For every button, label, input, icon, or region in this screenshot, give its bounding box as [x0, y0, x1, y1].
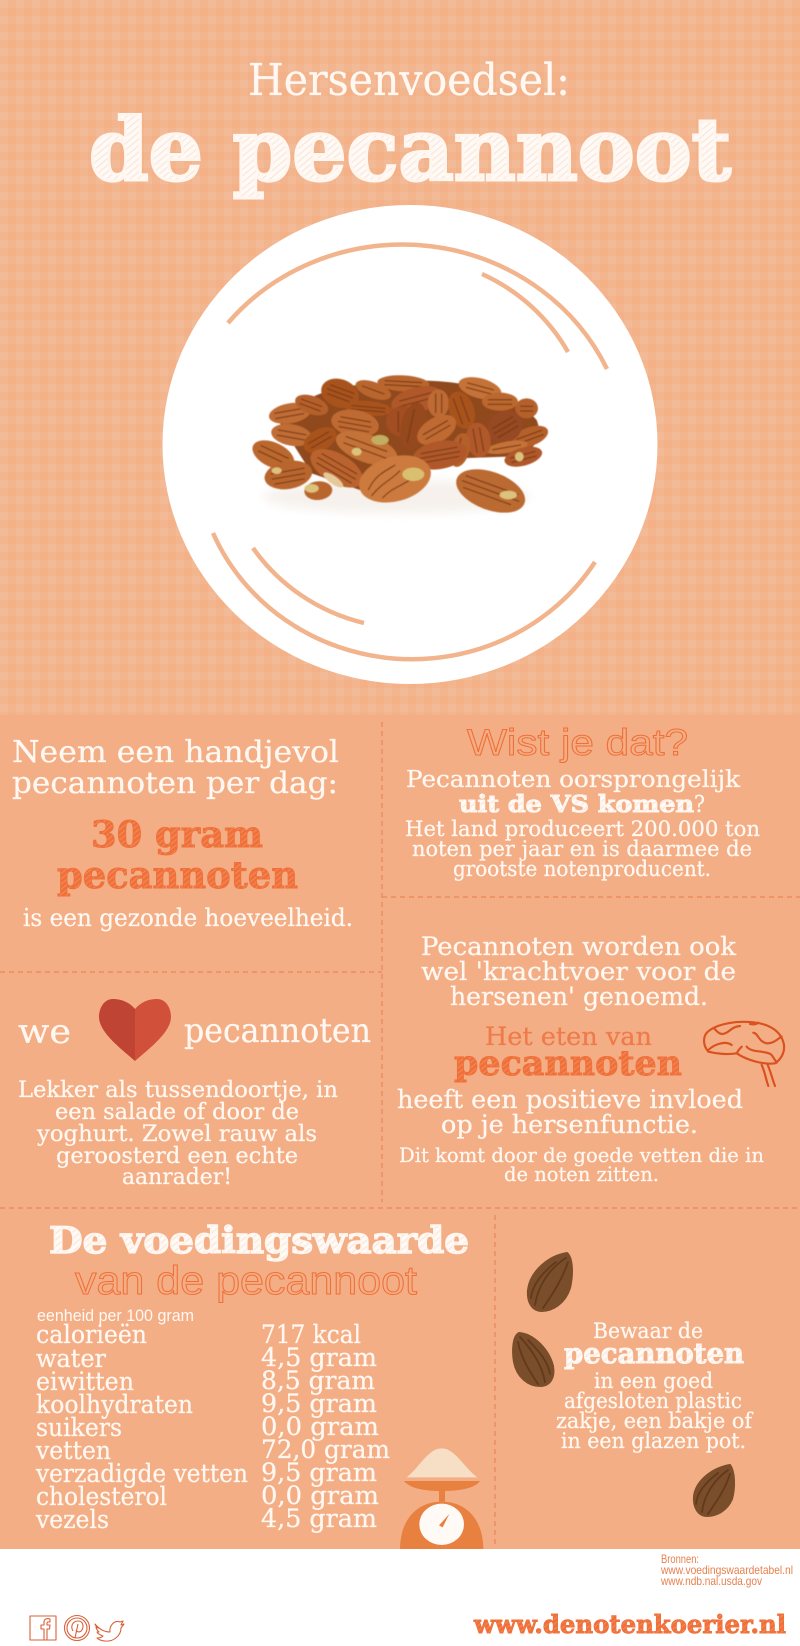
panel: nutrition table [35, 1220, 483, 1549]
icon: pecan shell bottom [694, 1465, 734, 1516]
panel: nutrition table: 4,5 gram [261, 1504, 377, 1533]
panel: nutrition table: suikers [36, 1413, 122, 1442]
icon: heart [99, 999, 171, 1061]
panel: did you know: grootste notenproducent. [453, 857, 711, 881]
panel: did you know [405, 722, 760, 881]
panel: nutrition table: eenheid per 100 gram [37, 1306, 194, 1325]
panel: storage tip: pecannoten [564, 1337, 744, 1370]
icon: social media [30, 1616, 124, 1641]
panel: brain food: op je hersenfunctie. [441, 1110, 698, 1139]
panel: brain food: heeft een positieve invloed [397, 1085, 743, 1114]
panel: storage tip: in een glazen pot. [561, 1429, 746, 1453]
panel: nutrition table: 717 kcal [261, 1320, 361, 1349]
panel: we love pecans: we [18, 1012, 71, 1052]
panel: brain food: Pecannoten worden ook [421, 932, 737, 961]
panel: brain food: de noten zitten. [504, 1162, 659, 1186]
panel: did you know: Wist je dat? [467, 722, 688, 763]
panel: nutrition table: 4,5 gram [261, 1343, 377, 1372]
sources: www.ndb.nal.usda.gov [660, 1574, 762, 1588]
panel: did you know: ? [694, 792, 705, 818]
panel: did you know: uit de VS komen [459, 791, 694, 818]
website url: www.denotenkoerier.nl [473, 1610, 786, 1639]
panel: daily amount: Neem een handjevol [12, 735, 339, 770]
panel: we love pecans: geroosterd een echte [56, 1144, 298, 1169]
panel: storage tip: Bewaar de [593, 1319, 703, 1343]
panel: brain food: wel 'krachtvoer voor de [421, 957, 736, 986]
panel: storage tip: afgesloten plastic [564, 1389, 742, 1413]
panel: nutrition table: 9,5 gram [261, 1458, 377, 1487]
plate with nuts [162, 205, 658, 684]
panel: brain food: Het eten van [485, 1022, 652, 1051]
panel: nutrition table: water [36, 1344, 106, 1373]
panel: nutrition table: koolhydraten [36, 1390, 193, 1419]
panel: did you know: Pecannoten oorsprongelijk [406, 767, 741, 793]
photo: pile of pecans [248, 373, 551, 521]
panel: nutrition table: 8,5 gram [261, 1366, 375, 1395]
sources: Bronnen: [661, 1552, 699, 1566]
dashed dividers [0, 722, 800, 1547]
panel: we love pecans: aanrader! [122, 1165, 232, 1190]
panel: brain food [397, 932, 784, 1186]
panel: nutrition table: De voedingswaarde [49, 1220, 469, 1262]
icon: kitchen scale [400, 1448, 483, 1549]
panel: brain food: Dit komt door de goede vetten die in [399, 1143, 764, 1167]
panel: nutrition table: vetten [35, 1436, 111, 1465]
panel: nutrition table: 72,0 gram [261, 1435, 390, 1464]
panel: daily amount [12, 735, 353, 932]
panel: daily amount: is een gezonde hoeveelheid. [23, 904, 353, 932]
panel: we love pecans: Lekker als tussendoortje, in [18, 1078, 338, 1103]
panel: nutrition table: vezels [35, 1505, 109, 1534]
panel: brain food: pecannoten [454, 1043, 682, 1084]
panel: daily amount: pecannoten [57, 853, 298, 897]
gingham header background [0, 0, 800, 715]
title: de pecannoot [89, 100, 731, 201]
panel: we love pecans: pecannoten [184, 1011, 371, 1051]
panel: nutrition table: 0,0 gram [261, 1412, 379, 1441]
sources [660, 1552, 793, 1588]
panel: did you know: noten per jaar en is daarmee de [412, 837, 752, 861]
panel: storage tip: in een goed [594, 1369, 713, 1393]
panel: we love pecans: een salade of door de [55, 1100, 299, 1125]
icon: pecan shell middle [513, 1333, 553, 1386]
panel: nutrition table: 0,0 gram [261, 1481, 379, 1510]
title: Hersenvoedsel: [248, 55, 570, 106]
panel: daily amount: pecannoten per dag: [12, 766, 338, 801]
panel: daily amount: 30 gram [91, 814, 263, 856]
panel: did you know: Het land produceert 200.000 ton [405, 817, 760, 841]
panel: nutrition table: cholesterol [36, 1482, 167, 1511]
panel: storage tip [513, 1253, 754, 1516]
panel: nutrition table: 9,5 gram [261, 1389, 377, 1418]
panel: nutrition table: verzadigde vetten [35, 1459, 248, 1488]
panel: storage tip: zakje, een bakje of [556, 1409, 754, 1433]
footer [0, 1549, 800, 1646]
panel: nutrition table: eiwitten [36, 1367, 134, 1396]
panel: nutrition table: calorieën [36, 1320, 147, 1349]
panel: we love pecans [18, 999, 371, 1190]
icon: pecan shell top [528, 1253, 572, 1311]
panel: brain food: hersenen' genoemd. [450, 982, 708, 1011]
title [89, 55, 731, 201]
icon: brain [704, 1022, 784, 1086]
panel: we love pecans: yoghurt. Zowel rauw als [36, 1122, 317, 1147]
panel: nutrition table: van de pecannoot [75, 1259, 417, 1303]
